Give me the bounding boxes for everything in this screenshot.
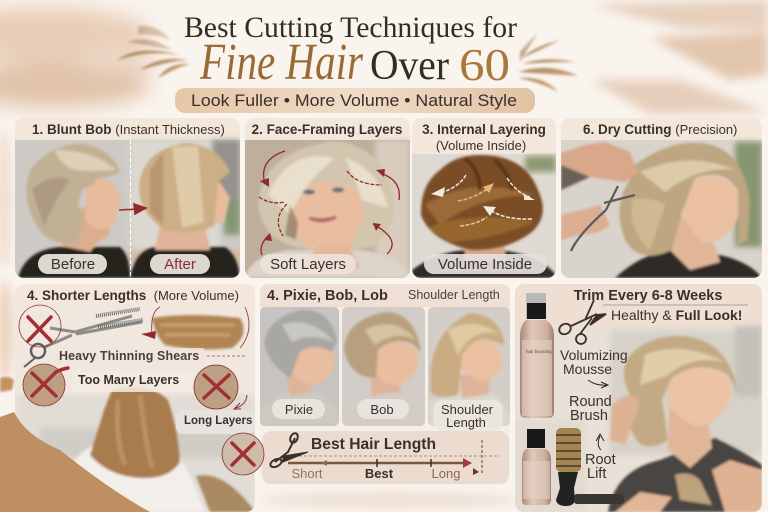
panel: Trim & products: Healthy & Full Look!: [611, 307, 742, 323]
label: Long Layers: [176, 410, 255, 434]
Best Hair Length bar: Short: [291, 466, 323, 481]
length scale: [288, 462, 465, 464]
panel: 3. Internal Layering: [412, 118, 556, 278]
title: [184, 11, 517, 91]
panel: 2. Face-Framing Layers: [245, 118, 410, 278]
large mousse can: [520, 293, 554, 418]
arrow: [588, 380, 608, 388]
label: Volumizing Mousse: [560, 347, 628, 377]
label: Heavy Thinning Shears: [60, 348, 245, 362]
flat brush: [574, 494, 624, 504]
Soft Layers label: [260, 254, 356, 274]
label: Too Many Layers: [78, 375, 179, 392]
arrow: [119, 204, 146, 214]
photo: Pixie: [260, 307, 339, 426]
arrow: [596, 434, 604, 450]
woman: [608, 336, 762, 512]
panel: 4. Shorter Lengths: [15, 284, 255, 512]
best label: Best Hair Length: [311, 436, 436, 453]
caption: Pixie: [285, 402, 313, 417]
panel: 4. Pixie, Bob, Lob: [222, 284, 510, 485]
Before label: [38, 254, 107, 274]
title: 60: [459, 39, 510, 90]
decorative wheat leaves right: [518, 33, 578, 92]
wicker chair: [196, 475, 255, 512]
Volume Inside label: [424, 254, 547, 274]
label: Root Lift: [585, 452, 616, 482]
Best Hair Length bar: Best: [365, 466, 394, 481]
caption: Length: [446, 415, 486, 430]
X mark 1: [19, 305, 61, 347]
photo: Bob: [342, 307, 425, 426]
label: Round Brush: Brush: [570, 408, 608, 424]
heading: 4. Shorter Lengths (More Volume): [27, 288, 239, 303]
After label: [150, 254, 210, 274]
caption: [433, 400, 503, 431]
photo: Shoulder Length: [428, 307, 510, 431]
Best Hair Length bar: [262, 431, 509, 484]
Volume Inside label: Volume Inside: [438, 256, 532, 273]
red arrows: [259, 151, 399, 255]
small arrow: [234, 395, 247, 409]
Best Hair Length bar: Long: [432, 466, 460, 481]
label: Long Layers: Long Layers: [184, 415, 252, 427]
panel: 4. Pixie, Bob, Lob: Shoulder Length: [408, 288, 500, 302]
icon: scissors: [269, 432, 308, 469]
panel: 6. Dry Cutting: [561, 118, 762, 278]
decorative wheat leaves left: [117, 26, 190, 78]
title: Over: [370, 43, 449, 89]
label: Root Lift: Lift: [587, 466, 606, 482]
X mark 3: [194, 365, 238, 409]
torn paper corner: [0, 412, 150, 512]
label: Volumizing Mousse: Volumizing: [560, 347, 628, 363]
label: Round Brush: [569, 394, 612, 424]
heading: 3. Internal Layering: [422, 122, 546, 137]
heading: 6. Dry Cutting (Precision): [583, 122, 737, 137]
scissors: [571, 186, 635, 251]
small mousse can: [522, 429, 551, 505]
heading: 1. Blunt Bob (Instant Thickness): [32, 122, 225, 137]
round brush: [556, 428, 581, 506]
X mark: [222, 433, 264, 475]
label: Too Many Layers: Too Many Layers: [78, 373, 179, 387]
label: Heavy Thinning Shears: Heavy Thinning Shears: [59, 349, 199, 363]
woman from behind: [62, 388, 205, 512]
large mousse can: hair boosting: [526, 349, 552, 354]
subtitle pill: [175, 88, 535, 113]
thinning shears: [24, 309, 143, 367]
divider: [130, 140, 131, 276]
subtitle pill: Look Fuller • More Volume • Natural Style: [191, 91, 517, 110]
panel: 1. Blunt Bob: [15, 118, 240, 278]
hair sample: [152, 315, 244, 349]
title: Best Cutting Techniques for: [184, 11, 517, 44]
caption: Shoulder: [441, 402, 494, 417]
Soft Layers label: Soft Layers: [270, 256, 346, 273]
After label: After: [164, 256, 196, 273]
title: Fine Hair: [199, 34, 364, 91]
panel: Trim & products: [515, 284, 762, 512]
Before label: Before: [51, 256, 95, 273]
caption: Bob: [370, 402, 394, 417]
icon: scissors: [557, 300, 606, 344]
heading: 2. Face-Framing Layers: [252, 122, 402, 137]
X mark 2: [23, 364, 68, 406]
label: Round Brush: Round: [569, 394, 612, 410]
label: Volumizing Mousse: Mousse: [563, 361, 612, 377]
heading: Trim Every 6-8 Weeks: [574, 288, 722, 304]
paint smudge: [0, 377, 14, 392]
white dashed arrows: [440, 175, 532, 226]
heading: 4. Pixie, Bob, Lob: [267, 288, 388, 304]
label: Root Lift: Root: [585, 452, 616, 468]
panel: 3. Internal Layering: (Volume Inside): [436, 138, 526, 153]
